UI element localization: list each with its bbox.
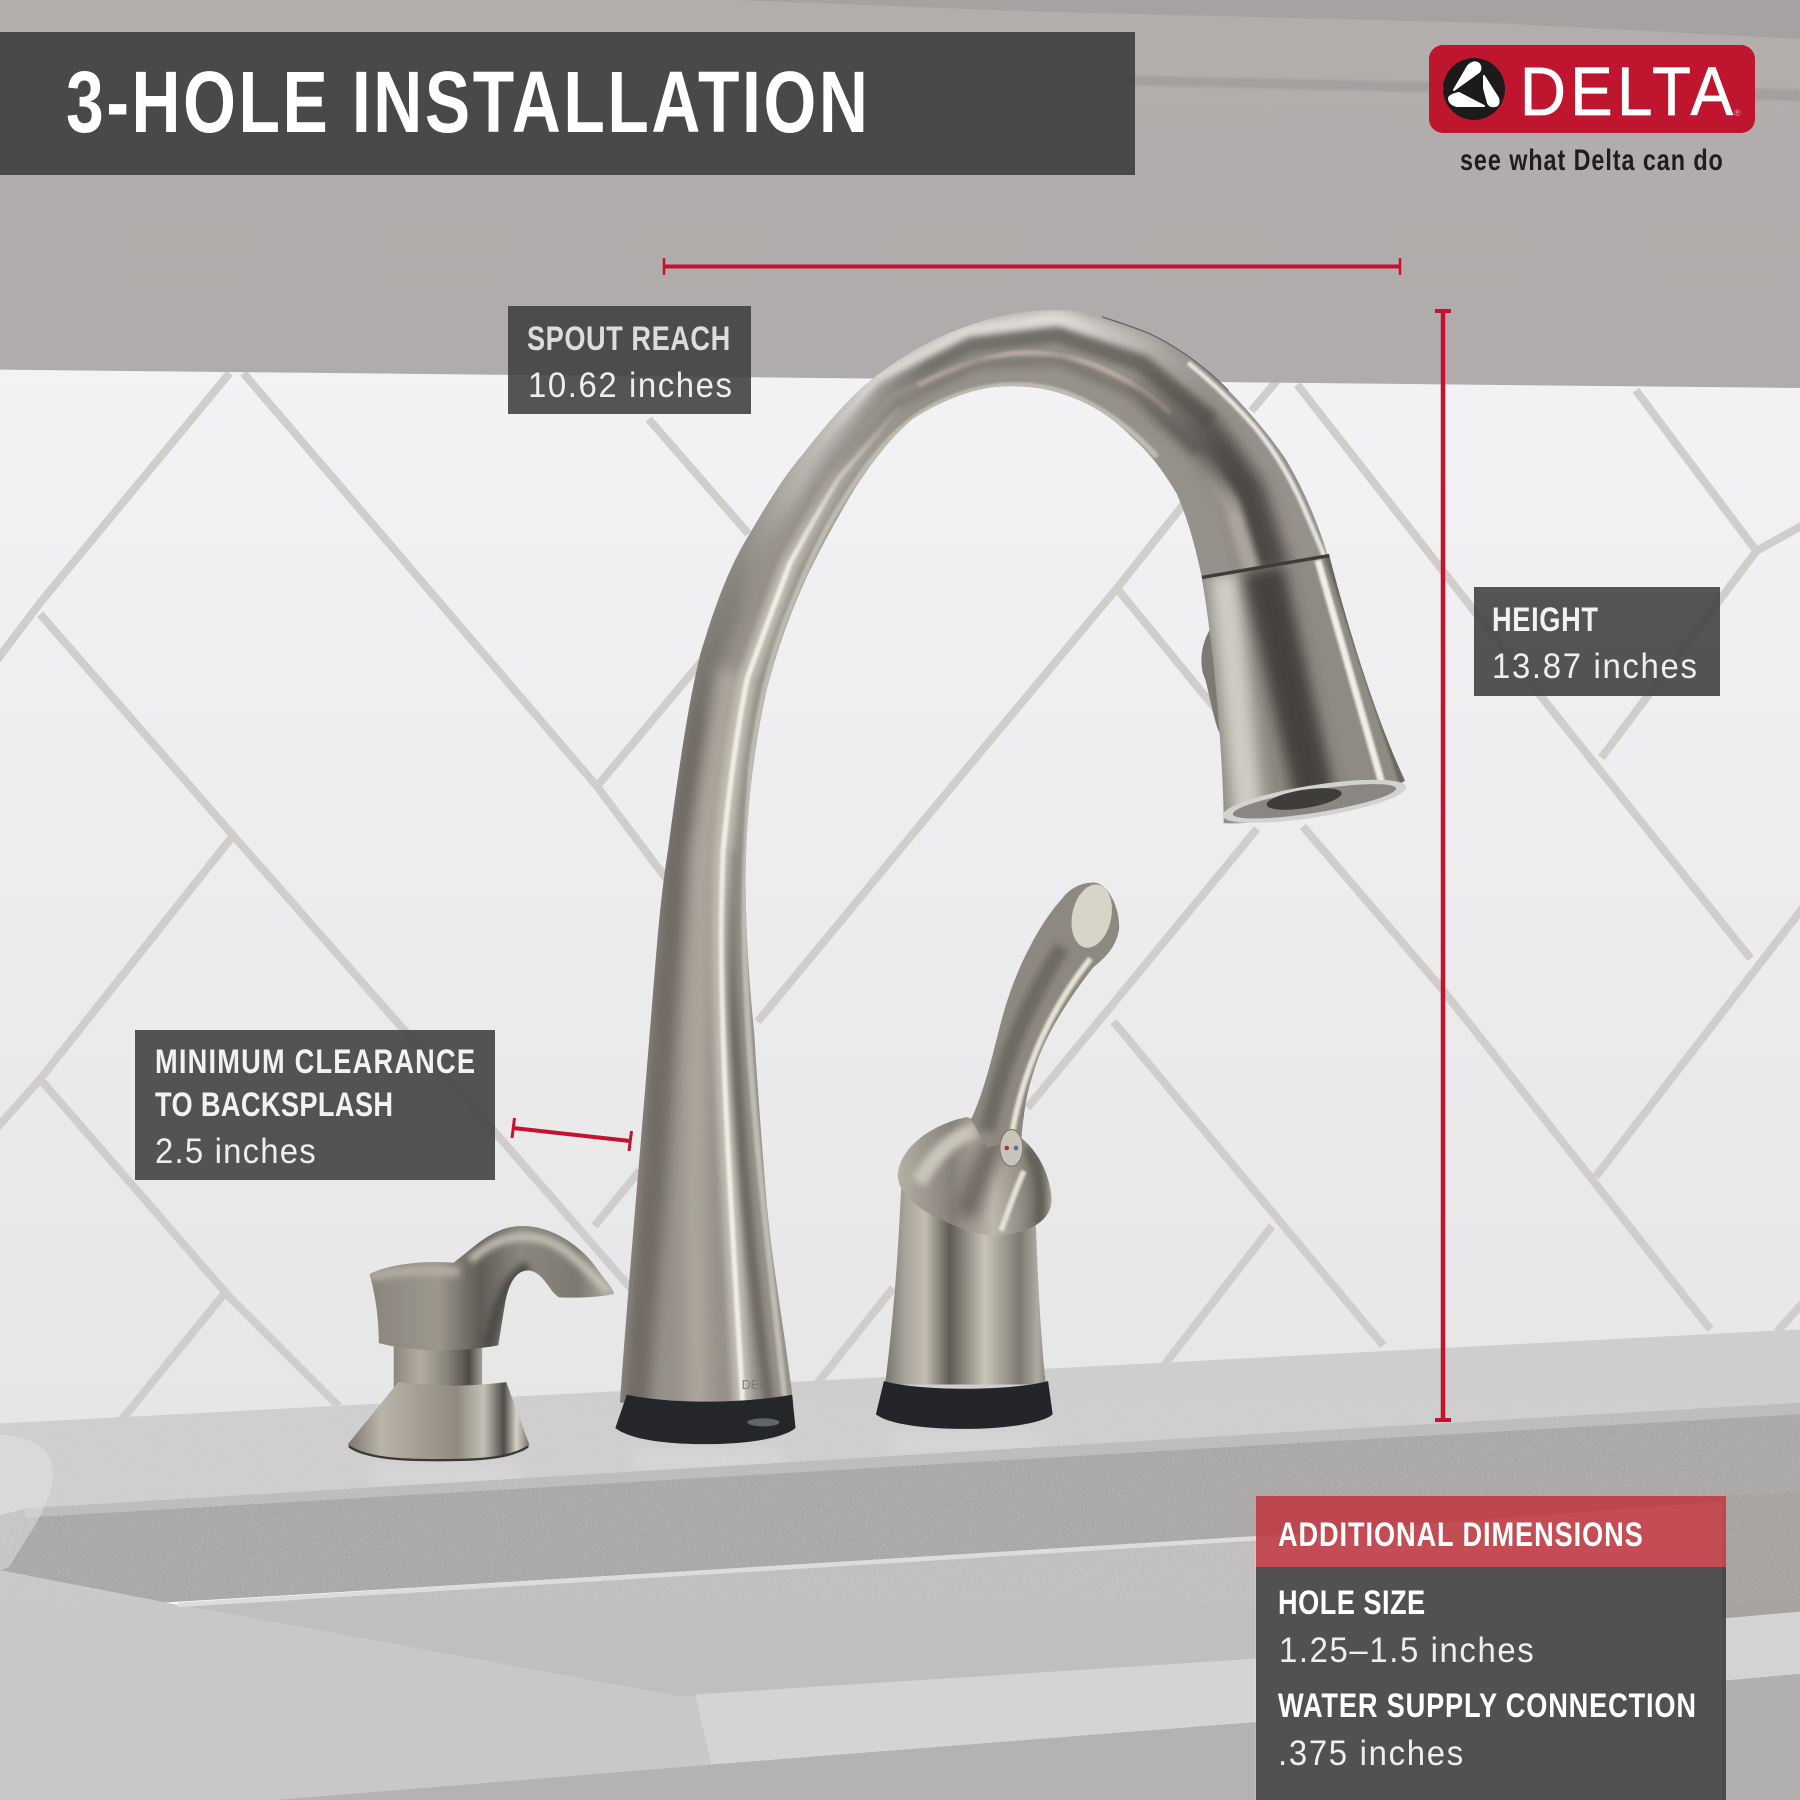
callout: minimum clearance: 2.5 inches [155,1132,316,1171]
spout black base [615,1378,796,1444]
panel body [1256,1567,1726,1800]
hole size: HOLE SIZE [1278,1583,1425,1622]
callout: minimum clearance: MINIMUM CLEARANCE [155,1042,475,1081]
cabinet upper edge [735,0,1800,39]
stone speckle [0,1403,1800,1603]
lower surface left [0,1570,712,1800]
callout: minimum clearance [135,1030,495,1180]
panel header [1256,1496,1726,1567]
tile wall [0,344,1800,1446]
counter top [0,1329,1800,1515]
sink interior [178,1541,1256,1697]
sprayer head [1202,556,1409,832]
Delta logo [1429,45,1755,133]
hole size [1278,1583,1534,1670]
callout: minimum clearance: TO BACKSPLASH [155,1085,393,1124]
backsplash clearance dimension line [512,1118,632,1151]
height dimension line [1435,311,1451,1420]
panel header: ADDITIONAL DIMENSIONS [1278,1515,1643,1554]
backsplash grout lines [0,373,1800,1421]
title: 3-HOLE INSTALLATION [66,53,868,151]
tagline: see what Delta can do [1460,143,1723,177]
upper cabinet band [0,0,1800,388]
sprayer trigger [1201,628,1224,735]
Delta logo: ® [1734,108,1741,118]
lower dark surface [273,1722,1256,1800]
water supply connection: WATER SUPPLY CONNECTION [1278,1686,1696,1725]
callout: height [1474,587,1720,696]
title bar [0,32,1135,175]
side handle [876,881,1119,1429]
right sink wall [1722,1492,1800,1619]
soft counter reflections [365,1433,1047,1488]
callout: height: 13.87 inches [1492,647,1697,686]
callout: spout reach: SPOUT REACH [527,319,730,358]
hole size: 1.25–1.5 inches [1279,1631,1534,1670]
spout reach dimension line [664,258,1400,275]
glass bowl edge [0,1435,53,1570]
callout: height: HEIGHT [1492,600,1598,639]
counter front edge [0,1403,1800,1603]
soap dispenser [348,1226,614,1460]
spout outer rim line [1102,317,1228,390]
faucet: main spout [620,310,1328,1423]
callout: spout reach: 10.62 inches [528,366,732,405]
water supply connection [1278,1686,1696,1773]
icon: Delta triangle mark [1443,58,1505,120]
water supply connection: .375 inches [1278,1734,1463,1773]
panel: additional dimensions [1256,1496,1726,1800]
callout: spout reach [508,306,751,414]
lower lit strip [696,1659,1256,1764]
logo wordmark: DELTA [1520,54,1734,131]
spout black base: DEL [742,1378,766,1392]
spray face [1220,771,1409,832]
